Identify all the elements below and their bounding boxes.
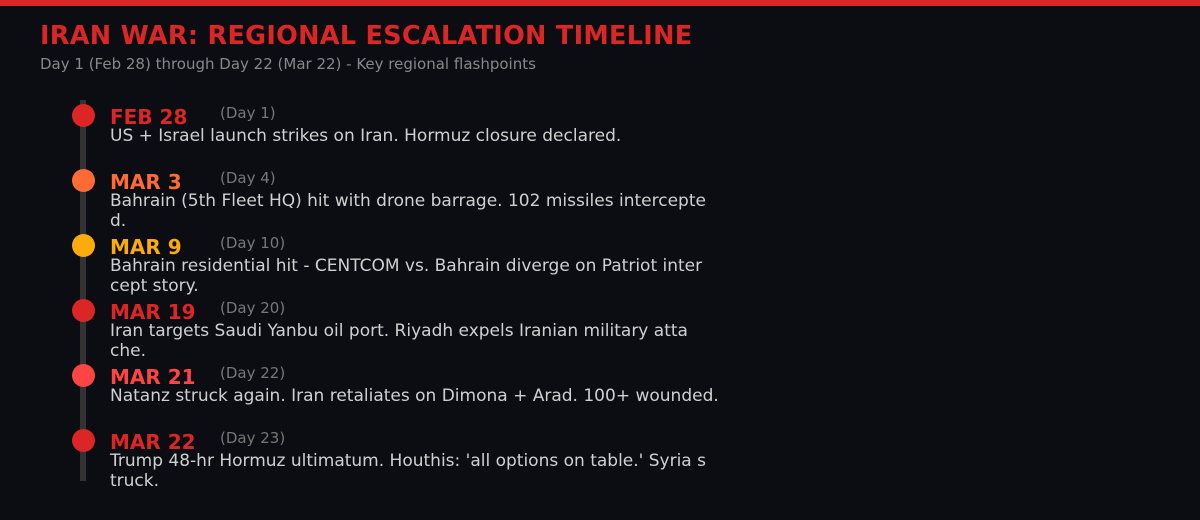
top bar	[0, 0, 1200, 6]
event: Mar 22: MAR 22	[110, 430, 196, 454]
event: Mar 22: Trump 48-hr Hormuz ultimatum. Houthis: 'all options on table.' Syria s	[110, 451, 706, 471]
event: Mar 22: truck.	[110, 471, 159, 491]
timeline line	[80, 100, 86, 481]
event: Feb 28: FEB 28	[110, 105, 187, 129]
event: Mar 3: MAR 3	[110, 170, 182, 194]
text: (Day 20)	[220, 299, 285, 317]
event: Mar 19: Iran targets Saudi Yanbu oil port. Riyadh expels Iranian military atta	[110, 321, 688, 341]
text: (Day 4)	[220, 169, 276, 187]
text: (Day 22)	[220, 364, 285, 382]
event: Mar 9: cept story.	[110, 276, 199, 296]
event: Mar 21: Natanz struck again. Iran retaliates on Dimona + Arad. 100+ wounded.	[110, 386, 719, 406]
event: Mar 3: d.	[110, 211, 126, 231]
title: IRAN WAR: REGIONAL ESCALATION TIMELINE	[40, 21, 692, 51]
event: Mar 9	[72, 234, 702, 296]
text: (Day 23)	[220, 429, 285, 447]
event: Mar 22	[72, 429, 706, 491]
event: Mar 9: MAR 9	[110, 235, 182, 259]
event: Mar 9: Bahrain residential hit - CENTCOM vs. Bahrain diverge on Patriot inter	[110, 256, 702, 276]
event: Mar 21: MAR 21	[110, 365, 196, 389]
subtitle: Day 1 (Feb 28) through Day 22 (Mar 22) - Key regional flashpoints	[40, 55, 536, 73]
event: Mar 19: che.	[110, 341, 146, 361]
event: Feb 28: US + Israel launch strikes on Iran. Hormuz closure declared.	[110, 126, 621, 146]
event: Mar 3	[72, 169, 706, 231]
text: (Day 10)	[220, 234, 285, 252]
event: Mar 3: Bahrain (5th Fleet HQ) hit with drone barrage. 102 missiles intercepte	[110, 191, 706, 211]
text: (Day 1)	[220, 104, 276, 122]
event: Mar 19: MAR 19	[110, 300, 196, 324]
event: Feb 28	[72, 104, 621, 146]
event: Mar 21	[72, 364, 719, 406]
event: Mar 19	[72, 299, 688, 361]
